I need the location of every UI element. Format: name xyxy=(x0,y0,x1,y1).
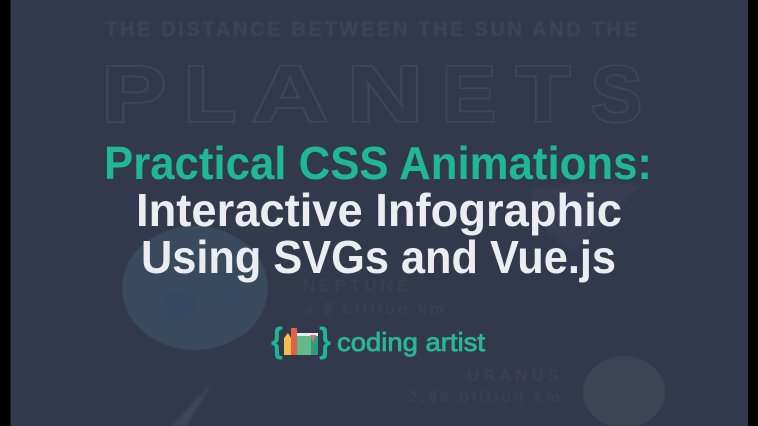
faded outlined heading: planets: T xyxy=(516,49,570,138)
logo icon: books and braces: } xyxy=(319,321,331,360)
logo xyxy=(271,321,486,360)
title line 2: Interactive Infographic xyxy=(136,184,622,236)
faded label: uranus xyxy=(409,366,560,406)
title line 3: Using SVGs and Vue.js xyxy=(141,231,616,283)
faded outlined heading: planets: A xyxy=(252,49,328,138)
faded label: uranus: URANUS xyxy=(467,366,559,385)
logo icon: books and braces: { xyxy=(271,321,283,360)
logo icon: books and braces xyxy=(271,321,331,360)
faded outlined heading: planets: N xyxy=(347,49,423,138)
faded label: neptune: NEPTUNE xyxy=(303,276,408,295)
faded planet behind title xyxy=(532,183,640,250)
faded outlined heading: planets: E xyxy=(442,49,496,138)
faded outlined heading: planets: P xyxy=(102,49,166,138)
title xyxy=(104,137,652,283)
faded outlined heading: planets: L xyxy=(184,49,236,138)
faded label: uranus: 2.88 billion km xyxy=(409,389,560,406)
planet: neptune xyxy=(122,226,268,350)
planet: uranus xyxy=(583,356,665,426)
logo wordmark: coding artist xyxy=(337,327,486,357)
title line 1: Practical CSS Animations: xyxy=(104,137,652,189)
faded label: neptune: 4.5 billion km xyxy=(304,301,444,318)
faded heading: the distance: THE DISTANCE BETWEEN THE SUN AND THE xyxy=(105,19,637,41)
faded label: neptune xyxy=(303,276,444,318)
faded outlined heading: planets xyxy=(102,49,642,138)
faded comet xyxy=(172,382,213,426)
faded outlined heading: planets: S xyxy=(591,49,642,138)
